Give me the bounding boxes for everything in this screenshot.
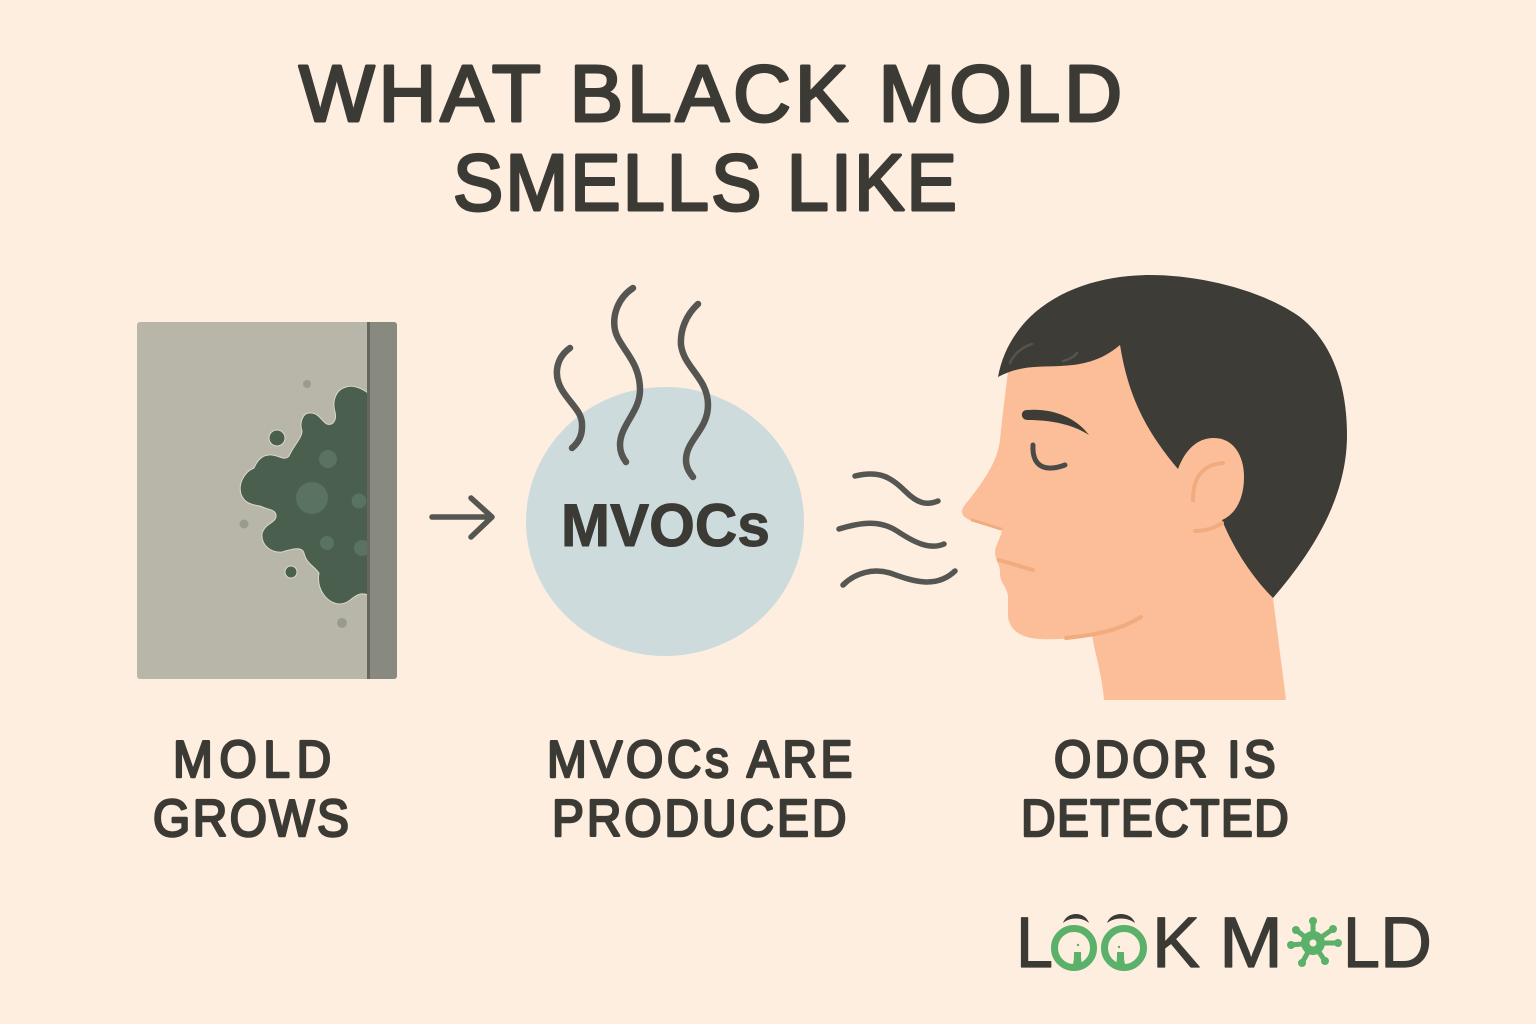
panel: MVOCs circle	[526, 288, 804, 656]
logo eyes	[1054, 914, 1144, 968]
logo: LOOK MOLD: D	[1380, 904, 1432, 983]
panel: human head profile	[962, 275, 1347, 700]
caption: mold grows	[153, 730, 349, 847]
odor waves	[839, 474, 955, 585]
caption: mvocs are produced	[547, 730, 852, 847]
eyebrow	[1022, 410, 1089, 435]
title: WHAT BLACK MOLD	[299, 49, 1122, 138]
caption: odor is detected	[1021, 730, 1289, 847]
logo: LOOK MOLD: L	[1016, 904, 1053, 983]
logo: LOOK MOLD: K	[1152, 904, 1200, 983]
ear and face creases	[972, 463, 1223, 638]
rising vapour lines	[557, 288, 708, 477]
hair	[998, 275, 1347, 598]
logo: LOOK MOLD	[1016, 904, 1432, 983]
caption: mvocs are produced: MVOCs ARE	[547, 730, 852, 788]
logo: LOOK MOLD: L	[1343, 904, 1380, 983]
title: SMELLS LIKE	[453, 139, 957, 228]
caption: odor is detected: ODOR IS	[1054, 730, 1276, 788]
logo: LOOK MOLD: M	[1219, 904, 1283, 983]
logo mold spore	[1287, 917, 1342, 967]
face and neck	[962, 345, 1286, 700]
ear	[1178, 438, 1244, 520]
panel: moldy wall	[137, 322, 397, 679]
caption: mold grows: GROWS	[153, 789, 349, 847]
mold patch	[240, 386, 370, 604]
caption: odor is detected: DETECTED	[1021, 789, 1289, 847]
hair highlights	[1010, 344, 1077, 363]
caption: mold grows: MOLD	[173, 730, 331, 788]
closed eye	[1033, 445, 1065, 468]
MVOCs label: MVOCs	[561, 492, 770, 559]
arrow	[432, 498, 492, 537]
caption: mvocs are produced: PRODUCED	[552, 789, 846, 847]
title	[299, 49, 1122, 228]
